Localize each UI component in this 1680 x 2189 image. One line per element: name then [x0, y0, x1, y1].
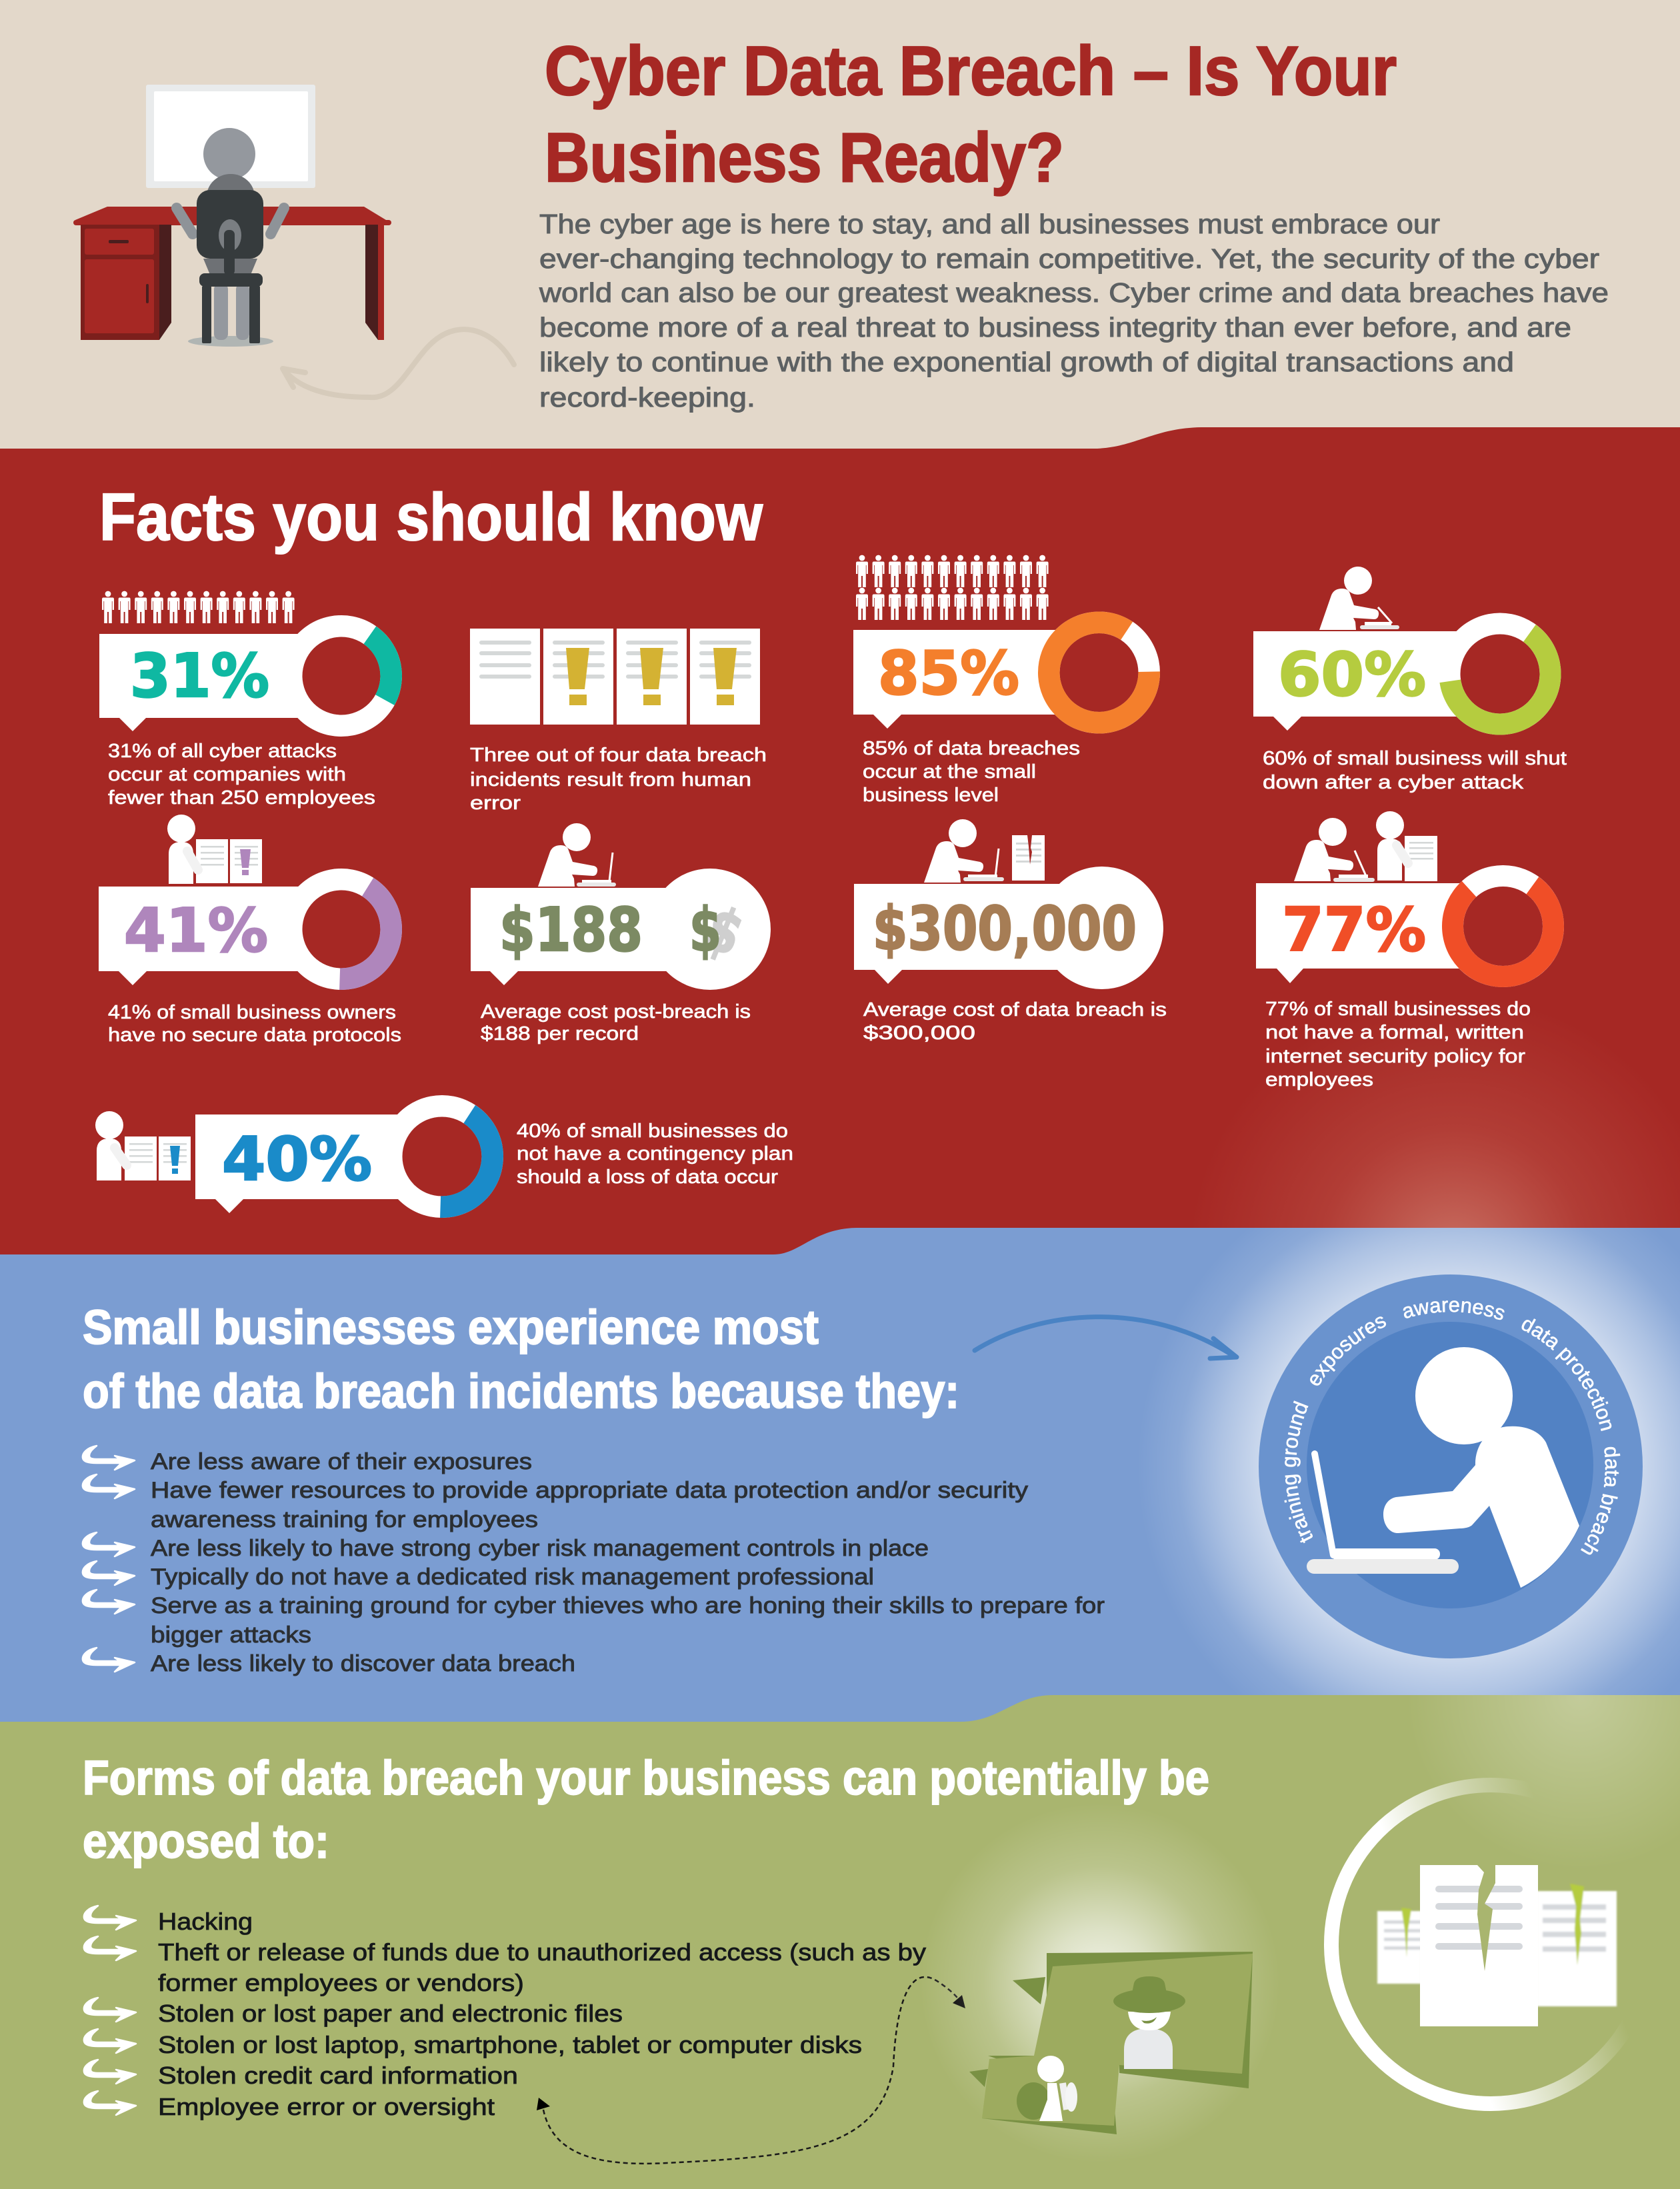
text: intro paragraph	[539, 209, 1609, 413]
stat card: 60%	[1278, 640, 1426, 710]
list: reasons: Typically do not have a dedicated risk management professional	[151, 1564, 874, 1590]
icon: hacker panels	[913, 1800, 1287, 2173]
icon: two rows of people	[856, 555, 1049, 620]
text: 77% caption: internet security policy for	[1265, 1046, 1525, 1067]
stat card: $188	[499, 895, 643, 965]
icon: round badge with person at laptop	[1259, 1274, 1643, 1658]
icon: person at desk seen from behind	[73, 85, 391, 347]
text: 60% caption	[1263, 748, 1567, 793]
icon: person at laptop	[538, 823, 616, 887]
labels: curved words: training ground	[1284, 1400, 1313, 1544]
panel: forms of breach background	[0, 1653, 1680, 2189]
list: reasons: Are less likely to have strong cyber risk management controls in place	[151, 1536, 929, 1561]
icon: two people with laptop and document	[1294, 811, 1437, 882]
list: reasons: Are less aware of their exposures	[151, 1449, 532, 1474]
fact: 41%	[99, 815, 410, 1046]
text: three out of four caption	[470, 745, 767, 814]
labels: curved words: exposures	[1310, 1316, 1387, 1386]
list: forms: Employee error or oversight	[158, 2093, 495, 2120]
stat card: $300,000	[873, 894, 1137, 964]
icon: dollar signs: $	[695, 893, 753, 971]
text: 60% caption: 60% of small business will shut	[1263, 748, 1567, 769]
list: forms: Hacking	[158, 1908, 253, 1935]
text: 41% caption	[108, 1002, 401, 1046]
stat card: 77%	[1282, 895, 1426, 965]
fact: three out of four	[470, 629, 767, 814]
text: 60% caption: down after a cyber attack	[1263, 772, 1524, 793]
figure: laptop	[1307, 1454, 1459, 1574]
fact: 85%	[853, 555, 1160, 806]
text: 41% caption: have no secure data protocols	[108, 1025, 401, 1046]
panel: forms of breach	[83, 1752, 1650, 2173]
panel: intro	[73, 33, 1609, 413]
icon: left document	[1377, 1908, 1421, 1984]
stat card: 85%	[878, 639, 1019, 709]
text: intro paragraph: record-keeping.	[539, 382, 755, 413]
icon: document pages with exclamation marks	[470, 629, 760, 725]
panel: facts background	[0, 427, 1680, 1280]
figure: victim with backpack	[1017, 2056, 1077, 2121]
fact: $188	[471, 823, 771, 1045]
stat card: 31%	[130, 641, 269, 711]
text: 77% caption: not have a formal, written	[1265, 1022, 1524, 1043]
heading: small businesses: of the data breach incidents because they:	[83, 1365, 959, 1418]
list: forms: Stolen or lost laptop, smartphone, tablet or computer disks	[158, 2031, 862, 2058]
stat card	[195, 1087, 512, 1226]
stat card	[1253, 604, 1570, 744]
panel: small business background	[0, 1228, 1680, 1722]
text: $300,000 caption: Average cost of data breach is	[863, 999, 1167, 1021]
stat card	[99, 607, 411, 745]
labels: curved words: awareness	[1403, 1300, 1505, 1320]
icon: center document	[1420, 1865, 1538, 2026]
text: 31% caption: 31% of all cyber attacks	[108, 741, 337, 762]
text: 77% caption	[1265, 999, 1531, 1091]
stat card: 41%	[124, 896, 268, 966]
fact: 60%	[1253, 567, 1570, 793]
heading: facts: Facts you should know	[99, 480, 763, 555]
icon: person with documents	[95, 1111, 191, 1180]
text: $300,000 caption	[863, 999, 1167, 1044]
figure: person	[1383, 1347, 1579, 1588]
figure: hacker with hat	[1113, 1976, 1185, 2069]
list: reasons: awareness training for employees	[151, 1507, 538, 1532]
heading: forms of breach	[83, 1752, 1209, 1868]
icon: right document	[1537, 1884, 1617, 2006]
labels: curved words: data breach	[1581, 1446, 1620, 1554]
text: 85% caption: 85% of data breaches	[863, 738, 1080, 759]
text: 40% caption: not have a contingency plan	[517, 1143, 793, 1164]
icon: torn documents in ring	[1331, 1785, 1650, 2104]
list: forms: Theft or release of funds due to unauthorized access (such as by	[158, 1938, 926, 1966]
stat card	[471, 869, 771, 990]
text: intro paragraph: likely to continue with the exponential growth of digital transactions and	[539, 347, 1514, 377]
text: 40% caption: should a loss of data occur	[517, 1166, 778, 1188]
fact: 31%	[99, 591, 411, 809]
fact: 40%	[95, 1087, 793, 1226]
title: Cyber Data Breach – Is Your	[545, 33, 1397, 110]
icon: person at device	[1319, 567, 1399, 630]
heading: forms of breach: Forms of data breach your business can potentially be	[83, 1752, 1209, 1805]
icon: dollar signs: $	[689, 895, 721, 965]
stat card	[99, 861, 410, 998]
panel: facts	[95, 480, 1573, 1226]
text: 77% caption: 77% of small businesses do	[1265, 999, 1531, 1020]
icon: person with documents	[167, 815, 262, 884]
text: intro paragraph: world can also be our greatest weakness. Cyber crime and data breaches have	[539, 277, 1609, 308]
list: forms: former employees or vendors)	[158, 1969, 524, 1996]
heading: forms of breach: exposed to:	[83, 1815, 329, 1868]
fact: 77%	[1256, 811, 1573, 1091]
list: reasons: Serve as a training ground for cyber thieves who are honing their skills to prepare for	[151, 1593, 1105, 1618]
stat card	[853, 612, 1160, 733]
panel: intro background	[0, 0, 1680, 467]
text: three out of four caption: incidents result from human	[470, 769, 751, 791]
icon: row of people	[102, 591, 295, 623]
stat card	[1256, 856, 1573, 997]
list: forms	[84, 1906, 926, 2120]
panel: small business	[81, 1274, 1643, 1676]
title	[545, 33, 1397, 197]
list: reasons: bigger attacks	[151, 1622, 311, 1648]
text: 41% caption: 41% of small business owners	[108, 1002, 396, 1023]
text: $188 caption: $188 per record	[481, 1023, 639, 1045]
arrow: squiggle toward desk	[283, 329, 514, 397]
list: forms: Stolen or lost paper and electronic files	[158, 2000, 623, 2027]
text: 85% caption	[863, 738, 1080, 806]
stat card: 40%	[222, 1124, 372, 1194]
text: $188 caption	[481, 1001, 751, 1045]
heading: small businesses	[83, 1301, 959, 1418]
stat card	[854, 867, 1163, 989]
text: intro paragraph: The cyber age is here to stay, and all businesses must embrace our	[539, 209, 1440, 239]
text: 31% caption: occur at companies with	[108, 764, 346, 785]
text: $300,000 caption: $300,000	[863, 1023, 975, 1044]
text: three out of four caption: error	[470, 793, 521, 814]
text: three out of four caption: Three out of four data breach	[470, 745, 767, 766]
text: $188 caption: Average cost post-breach is	[481, 1001, 751, 1023]
text: intro paragraph: ever-changing technology to remain competitive. Yet, the security of the cyber	[539, 243, 1599, 274]
icon: person at laptop with torn document	[924, 819, 1045, 883]
list: reasons: Are less likely to discover data breach	[151, 1651, 575, 1676]
labels: curved words: data protection	[1521, 1318, 1612, 1431]
title: Business Ready?	[545, 119, 1064, 197]
text: 77% caption: employees	[1265, 1069, 1373, 1091]
text: 31% caption	[108, 741, 375, 809]
labels: curved words	[1284, 1300, 1620, 1554]
text: 85% caption: business level	[863, 785, 999, 806]
heading: small businesses: Small businesses experience most	[83, 1301, 819, 1354]
arrow: dashed two-way arrow	[537, 1977, 965, 2164]
text: 40% caption: 40% of small businesses do	[517, 1120, 788, 1142]
text: 85% caption: occur at the small	[863, 761, 1036, 783]
text: 31% caption: fewer than 250 employees	[108, 787, 375, 809]
text: intro paragraph: become more of a real threat to business integrity than ever before, and are	[539, 312, 1571, 343]
arrow: curved blue arrow	[975, 1317, 1237, 1358]
fact: $300,000	[854, 819, 1167, 1044]
list: forms: Stolen credit card information	[158, 2062, 518, 2089]
list: reasons: Have fewer resources to provide appropriate data protection and/or security	[151, 1478, 1028, 1503]
list: reasons	[83, 1446, 1105, 1676]
text: 40% caption	[517, 1120, 793, 1188]
